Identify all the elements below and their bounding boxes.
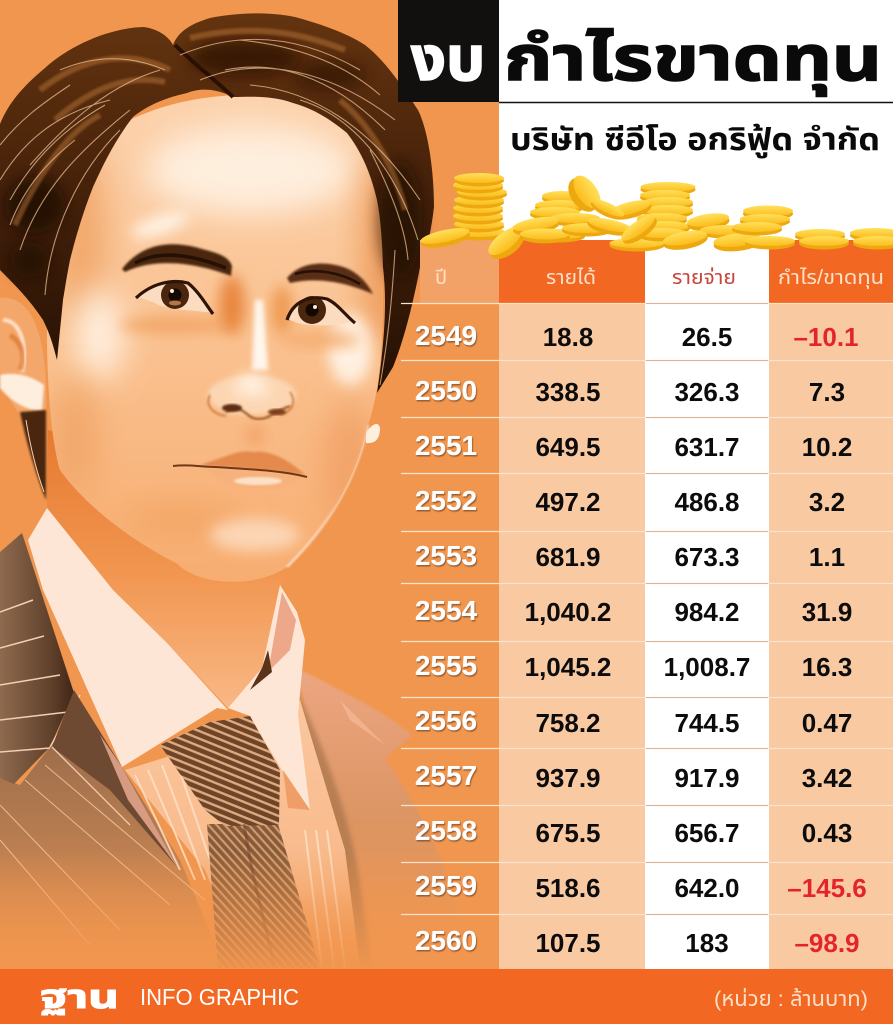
profit column fill — [769, 303, 893, 969]
left eyebrow — [122, 244, 232, 276]
row 2555: 16.3 — [802, 652, 852, 682]
expense column dividers and shadow — [646, 304, 768, 914]
row 2555 — [415, 650, 852, 682]
row 2554: 31.9 — [802, 597, 852, 627]
info graphic label: INFO GRAPHIC — [140, 984, 299, 1010]
row 2549: –10.1 — [793, 322, 859, 352]
expense column fill — [645, 303, 769, 969]
row 2558: 675.5 — [535, 818, 601, 848]
row 2560: 107.5 — [535, 928, 601, 958]
nose — [208, 300, 296, 445]
row 2558: 656.7 — [674, 818, 740, 848]
table body — [401, 303, 893, 969]
left side of jacket — [0, 700, 225, 968]
shirt — [125, 700, 360, 968]
subtitle: company name: บริษัท ซีอีโอ อกริฟู้ด จำกัด — [510, 122, 880, 158]
hair — [0, 13, 434, 393]
title badge: งบ: งบ — [411, 25, 485, 94]
row 2560: –98.9 — [794, 928, 860, 958]
row 2550: 7.3 — [809, 377, 845, 407]
row 2555: 1,008.7 — [664, 652, 750, 682]
neck — [47, 430, 340, 708]
row 2553: 681.9 — [535, 542, 601, 572]
row 2554: 1,040.2 — [525, 597, 611, 627]
row 2551: 10.2 — [802, 432, 852, 462]
row 2555: 1,045.2 — [525, 652, 611, 682]
row 2556: 758.2 — [535, 708, 601, 738]
table header — [420, 240, 893, 303]
face — [47, 95, 407, 582]
row 2550 — [415, 375, 845, 407]
bottom fade — [0, 850, 470, 969]
row 2553: 1.1 — [809, 542, 845, 572]
row 2554: 984.2 — [674, 597, 740, 627]
hair behind the ear — [20, 410, 46, 500]
icon: gold coins — [419, 171, 893, 265]
right eyebrow — [287, 264, 373, 294]
row 2553: 673.3 — [674, 542, 740, 572]
row 2551: 649.5 — [535, 432, 601, 462]
row 2551: 631.7 — [674, 432, 740, 462]
row 2558: 2558 — [415, 815, 477, 846]
row 2550: 326.3 — [674, 377, 740, 407]
row 2554: 2554 — [415, 595, 478, 626]
row 2558 — [415, 815, 852, 848]
row 2549: 2549 — [415, 320, 477, 351]
row 2559: –145.6 — [787, 873, 867, 903]
row 2552: 486.8 — [674, 487, 740, 517]
row 2559: 2559 — [415, 870, 477, 901]
row 2552: 497.2 — [535, 487, 601, 517]
row 2556: 744.5 — [674, 708, 740, 738]
title: กำไรขาดทุน: กำไรขาดทุน — [504, 25, 882, 96]
row 2556: 2556 — [415, 705, 477, 736]
collar — [28, 508, 310, 810]
table header: กำไร/ขาดทุน — [778, 267, 884, 289]
right eye — [287, 296, 355, 326]
row 2558: 0.43 — [802, 818, 852, 848]
row 2557: 2557 — [415, 760, 477, 791]
row 2557: 937.9 — [535, 763, 601, 793]
row 2555: 2555 — [415, 650, 477, 681]
right side of jacket — [297, 668, 470, 968]
revenue column fill — [499, 303, 645, 969]
logo: ฐาน — [40, 978, 119, 1015]
row 2551: 2551 — [415, 430, 477, 461]
portrait illustration — [0, 13, 470, 969]
row 2557: 917.9 — [674, 763, 740, 793]
row 2559: 642.0 — [674, 873, 740, 903]
footer bar — [0, 969, 893, 1024]
table header: รายจ่าย — [672, 266, 736, 289]
row 2559 — [415, 870, 867, 903]
row 2553 — [415, 540, 845, 572]
left eye — [136, 281, 213, 314]
row 2560: 183 — [685, 928, 729, 958]
lapel with pinstripes — [0, 533, 178, 868]
row 2557: 3.42 — [802, 763, 852, 793]
table header: รายได้ — [546, 266, 596, 289]
row 2553: 2553 — [415, 540, 477, 571]
row 2549: 26.5 — [682, 322, 732, 352]
row 2560 — [415, 925, 860, 958]
row 2549 — [415, 320, 859, 352]
unit note: (หน่วย : ล้านบาท) — [714, 987, 868, 1011]
row divider lines — [401, 304, 893, 914]
row 2552: 3.2 — [809, 487, 845, 517]
row 2559: 518.6 — [535, 873, 601, 903]
row 2552 — [415, 485, 845, 517]
row 2557 — [415, 760, 852, 793]
white title panel — [499, 0, 893, 240]
row 2556: 0.47 — [802, 708, 852, 738]
row 2560: 2560 — [415, 925, 477, 956]
ear — [0, 298, 380, 443]
title badge: งบ — [398, 0, 499, 102]
row 2552: 2552 — [415, 485, 477, 516]
row 2550: 338.5 — [535, 377, 601, 407]
row 2550: 2550 — [415, 375, 477, 406]
table header: ปี — [435, 267, 447, 289]
mouth — [173, 451, 307, 489]
row 2556 — [415, 705, 852, 738]
row 2549: 18.8 — [543, 322, 593, 352]
row 2554 — [415, 595, 852, 627]
row 2551 — [415, 430, 852, 462]
necktie — [160, 716, 320, 968]
